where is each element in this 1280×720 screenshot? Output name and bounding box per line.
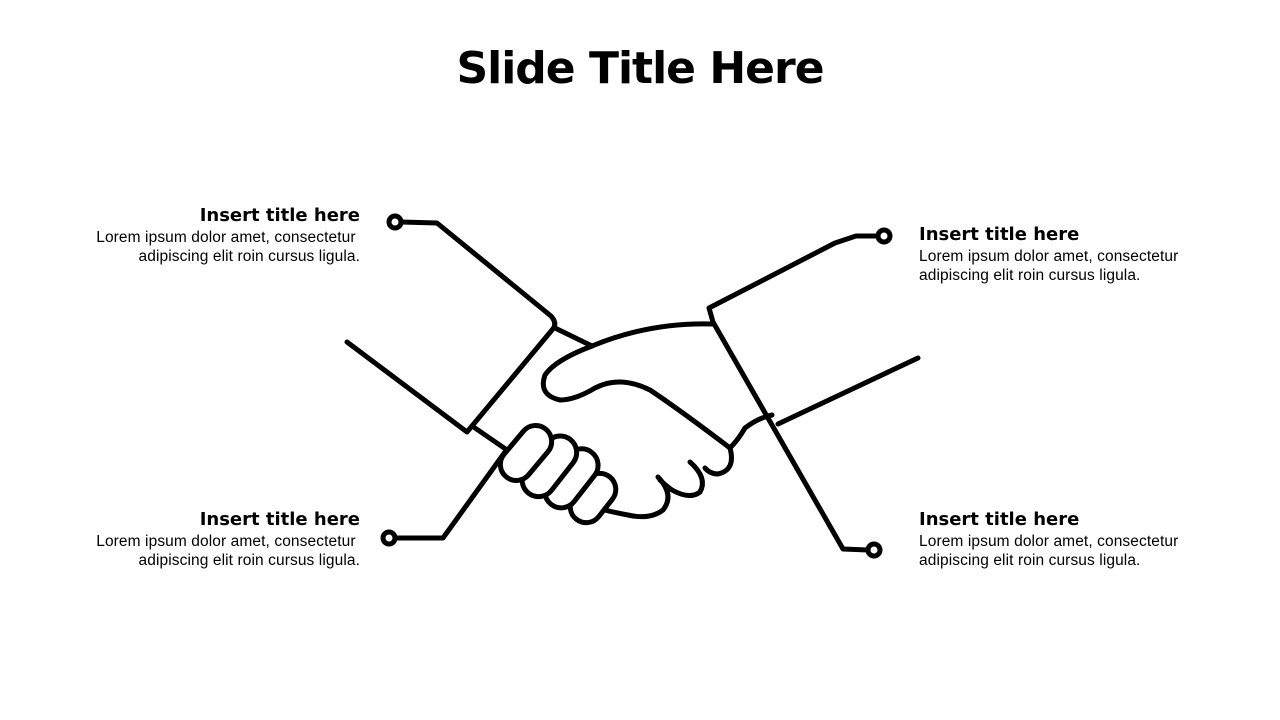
title: Slide Title Here (456, 43, 824, 94)
text block: bottom left (96, 509, 360, 569)
text block: bottom right (919, 509, 1178, 569)
text block: top left: adipiscing elit roin cursus ligula. (139, 248, 360, 265)
text block: bottom left: Insert title here (200, 509, 360, 530)
connector bottom left (383, 452, 505, 544)
text block: top right: Insert title here (919, 224, 1079, 245)
text block: bottom left: adipiscing elit roin cursus ligula. (139, 552, 360, 569)
text block: top left (96, 205, 360, 265)
text block: top right (919, 224, 1178, 284)
text block: bottom right: Insert title here (919, 509, 1079, 530)
right hand (543, 324, 772, 517)
text block: bottom left: Lorem ipsum dolor amet, consectetur (96, 533, 356, 550)
text block: bottom right: adipiscing elit roin cursus ligula. (919, 552, 1140, 569)
left hand fingers (494, 419, 622, 529)
text block: top left: Insert title here (200, 205, 360, 226)
text block: top right: Lorem ipsum dolor amet, consectetur (919, 248, 1178, 265)
text block: top left: Lorem ipsum dolor amet, consectetur (96, 229, 356, 246)
left sleeve with connector top (347, 216, 592, 450)
right sleeve with connectors (709, 230, 918, 556)
text block: bottom right: Lorem ipsum dolor amet, consectetur (919, 533, 1178, 550)
text block: top right: adipiscing elit roin cursus ligula. (919, 267, 1140, 284)
